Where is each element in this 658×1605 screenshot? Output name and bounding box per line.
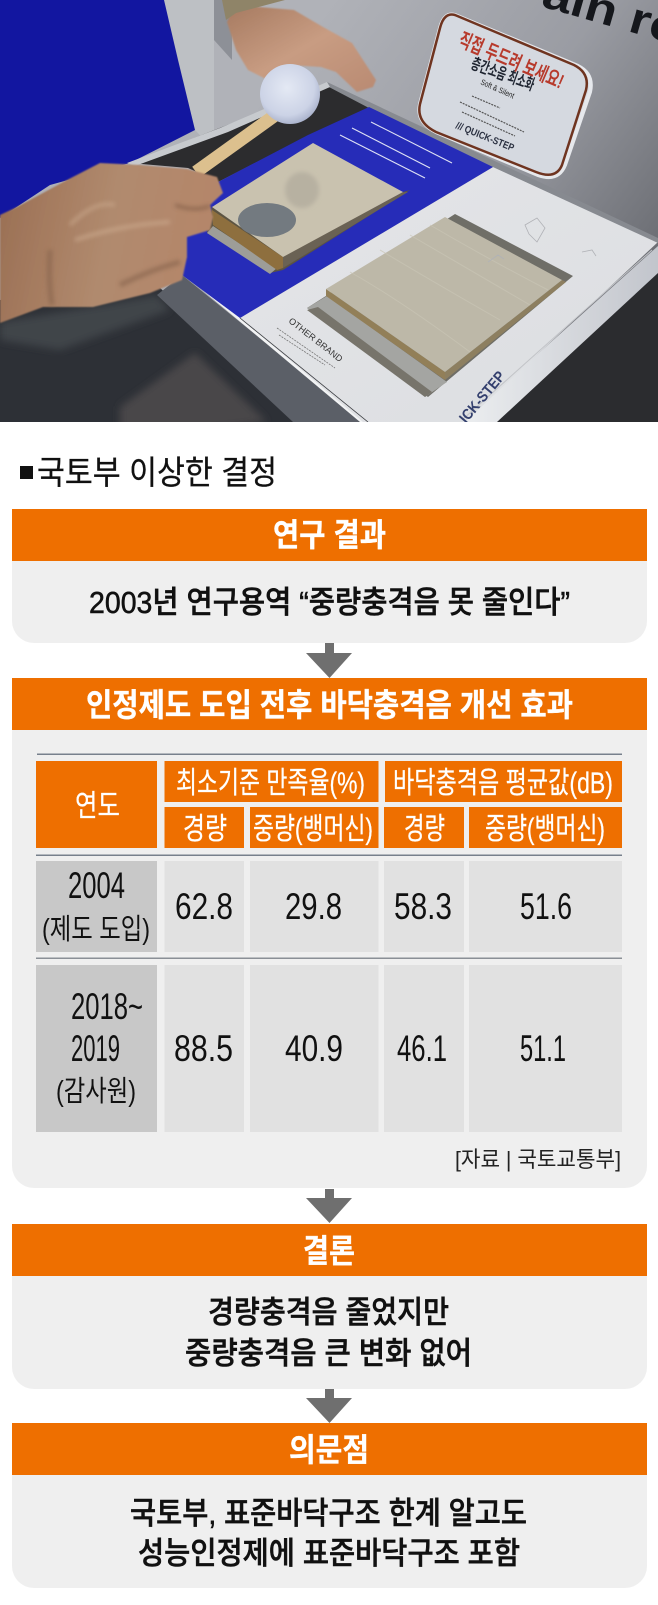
golf ball mallet [260, 64, 320, 124]
blue panel text lines [340, 122, 452, 178]
icons on box [488, 218, 596, 262]
tile 1 [212, 143, 403, 257]
text: conclusion [185, 1295, 472, 1371]
box white top [240, 167, 658, 422]
panel: certification effect [12, 678, 647, 1188]
panel: conclusion [12, 1224, 647, 1389]
tile 2 grain [350, 225, 548, 352]
row 2004: 58.3 [394, 886, 452, 927]
row 2018-2019: 88.5 [174, 1028, 233, 1069]
row 2004 [36, 861, 622, 952]
text: question [130, 1496, 527, 1571]
table header: 중량(뱅머신) [253, 813, 373, 846]
dark floor left [0, 285, 300, 422]
display sign: 직접 두드려 보세요! [455, 28, 567, 93]
table [36, 761, 622, 1132]
row 2018-2019: 46.1 [397, 1028, 447, 1069]
row 2018-2019: (감사원) [56, 1076, 136, 1108]
heading: certification effect: 인정제도 도입 전후 바닥충격음 개선 효과 [86, 687, 573, 723]
row 2018-2019: 40.9 [285, 1028, 343, 1069]
box labels: OTHER BRAND [287, 316, 345, 364]
photo: floor impact demonstration box: ICK-STEP [456, 368, 509, 427]
row 2004: 2004 [68, 865, 125, 906]
lower hand [0, 163, 223, 323]
title: 국토부 이상한 결정 [37, 454, 277, 491]
acrylic rim [327, 82, 658, 243]
table header: 연도 [75, 790, 120, 823]
table header [36, 761, 622, 848]
table header: 경량 [183, 813, 227, 846]
mallet handle [196, 116, 274, 172]
table header: 최소기준 만족율(%) [176, 767, 365, 800]
table header: 경량 [404, 813, 445, 846]
text: question: 국토부, 표준바닥구조 한계 알고도 [130, 1496, 527, 1531]
display sign [419, 15, 591, 177]
tile 2 recess [307, 214, 573, 397]
row 2018-2019: 51.1 [520, 1028, 566, 1069]
dark floor right [497, 273, 658, 422]
text: conclusion: 경량충격음 줄었지만 [208, 1295, 449, 1330]
row 2004: 62.8 [175, 886, 233, 927]
heading: question: 의문점 [289, 1432, 369, 1468]
display sign: 층간소음 최소화 [469, 55, 537, 94]
source note: [자료 | 국토교통부] [455, 1147, 621, 1172]
dark worn circle [238, 203, 296, 237]
arrow 3 [306, 1389, 352, 1423]
upper hand [227, 5, 376, 92]
text: question: 성능인정제에 표준바닥구조 포함 [138, 1536, 520, 1571]
panel: question [12, 1423, 647, 1588]
pale column behind the person [164, 0, 214, 150]
display sign: /// QUICK-STEP [454, 121, 516, 154]
text: 2003 study: 2003년 연구용역 “중량충격음 못 줄인다” [89, 585, 570, 620]
arrow 1 [306, 643, 352, 678]
heading: conclusion: 결론 [303, 1233, 355, 1269]
arrow 2 [306, 1189, 352, 1223]
display sign: Soft & Silent [479, 78, 516, 101]
wrist band [222, 0, 285, 20]
panel: research result [12, 509, 647, 643]
tile 2 side [326, 289, 445, 380]
text: conclusion: 중량충격음 큰 변화 없어 [185, 1336, 472, 1371]
box front side left [157, 275, 363, 422]
table header: 중량(뱅머신) [485, 813, 605, 846]
row 2018-2019: 2019 [71, 1028, 120, 1069]
heading: research result: 연구 결과 [273, 517, 386, 553]
row 2004: 51.6 [520, 886, 572, 927]
tile 2 [326, 217, 562, 372]
row 2004: (제도 도입) [42, 913, 150, 946]
row 2004: 29.8 [285, 886, 342, 927]
blue panel [182, 107, 493, 318]
tile 1 recess [207, 190, 410, 273]
row 2018-2019 [36, 965, 622, 1132]
box front side right [462, 246, 658, 422]
tile 1 side [212, 210, 283, 270]
row 2018-2019: 2018~ [71, 986, 143, 1027]
blue shirt [0, 0, 195, 218]
dark foam [130, 86, 369, 182]
box white rim left [201, 289, 363, 422]
photo: floor impact demonstration box [0, 0, 658, 440]
